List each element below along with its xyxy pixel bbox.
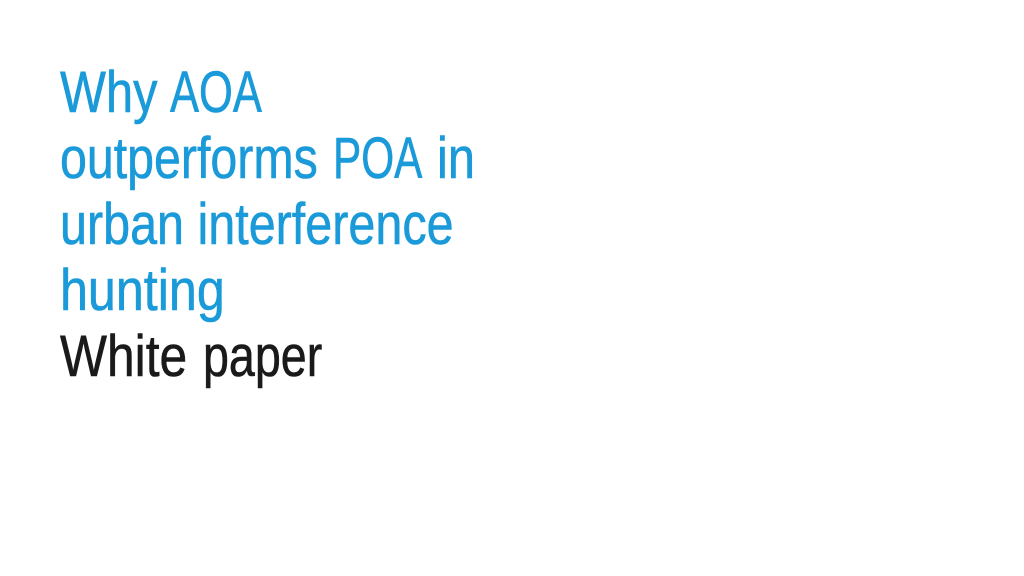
title line 2: outperforms [60,126,318,190]
title line 2 [60,126,475,190]
title line 2: in [437,126,475,190]
title line 4: hunting [60,258,225,322]
subtitle: White [60,324,187,388]
title block [60,60,475,388]
title line 2: POA [333,126,422,190]
title line 1: Why [60,60,157,124]
title line 3: urban interference [60,192,454,256]
title line 1: AOA [170,60,262,124]
subtitle: paper [203,324,322,388]
subtitle [60,324,322,388]
title line 1 [60,60,262,124]
